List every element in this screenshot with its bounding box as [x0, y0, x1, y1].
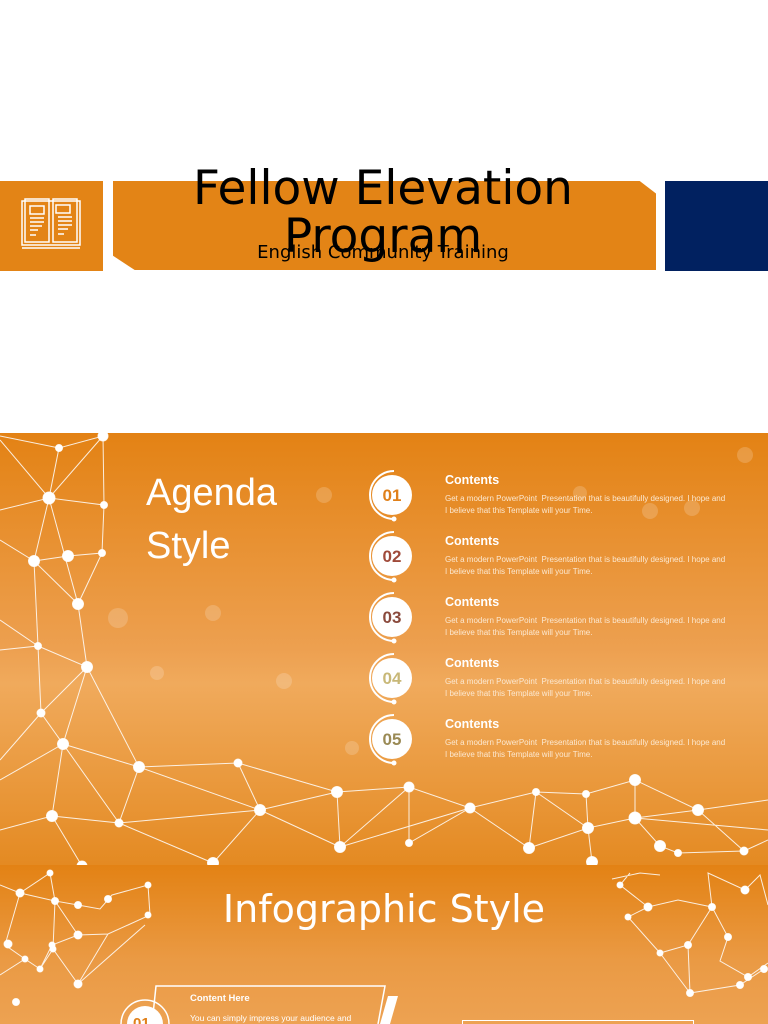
item 02: Contents: [445, 534, 499, 548]
item 03: Get a modern PowerPoint Presentation that is beautifully designed. I hope and I believe that this Template will your Time.: [445, 616, 725, 637]
content box 01: [120, 985, 398, 1024]
header: left icon block: [0, 181, 103, 271]
item 04: 04: [383, 669, 402, 688]
heading: Agenda Style: Agenda: [146, 472, 277, 514]
item 05: 05: [383, 730, 401, 749]
item 01: Get a modern PowerPoint Presentation that is beautifully designed. I hope and I believe that this Template will your Time.: [445, 494, 725, 515]
panel: infographic slide: [0, 865, 768, 1024]
item 02: Get a modern PowerPoint Presentation that is beautifully designed. I hope and I believe that this Template will your Time.: [445, 555, 725, 576]
network background: [0, 433, 768, 865]
content box 02 outline: [462, 1020, 694, 1024]
content box 01: You can simply impress your audience and: [190, 1013, 351, 1023]
heading: Agenda Style: [146, 472, 277, 567]
item 03: 03: [383, 608, 401, 627]
item 05: Contents: [445, 717, 499, 731]
heading: Infographic Style: Infographic Style: [223, 887, 545, 931]
item 01: 01: [383, 486, 401, 505]
item 04: [369, 653, 725, 704]
icon: open book: [21, 198, 81, 249]
item 05: Get a modern PowerPoint Presentation that is beautifully designed. I hope and I believe that this Template will your Time.: [445, 738, 725, 759]
network corners: [0, 870, 768, 1006]
item 04: Get a modern PowerPoint Presentation that is beautifully designed. I hope and I believe that this Template will your Time.: [445, 677, 725, 698]
item 02: [369, 531, 725, 582]
item 01: [369, 470, 725, 522]
header: central orange banner: [113, 181, 656, 270]
item 02: 02: [383, 547, 401, 566]
item 05: [369, 714, 725, 766]
panel: agenda slide: [0, 433, 768, 865]
subtitle: English Community Training: [257, 242, 509, 263]
agenda list: [369, 470, 725, 766]
content box 01: Content Here: [190, 993, 250, 1004]
item 03: [369, 592, 725, 644]
title: Fellow Elevation Program: [193, 161, 573, 264]
item 03: Contents: [445, 595, 499, 609]
item 01: Contents: [445, 473, 499, 487]
header: navy block: [665, 181, 768, 271]
item 04: Contents: [445, 656, 499, 670]
heading: Agenda Style: Style: [146, 525, 230, 567]
